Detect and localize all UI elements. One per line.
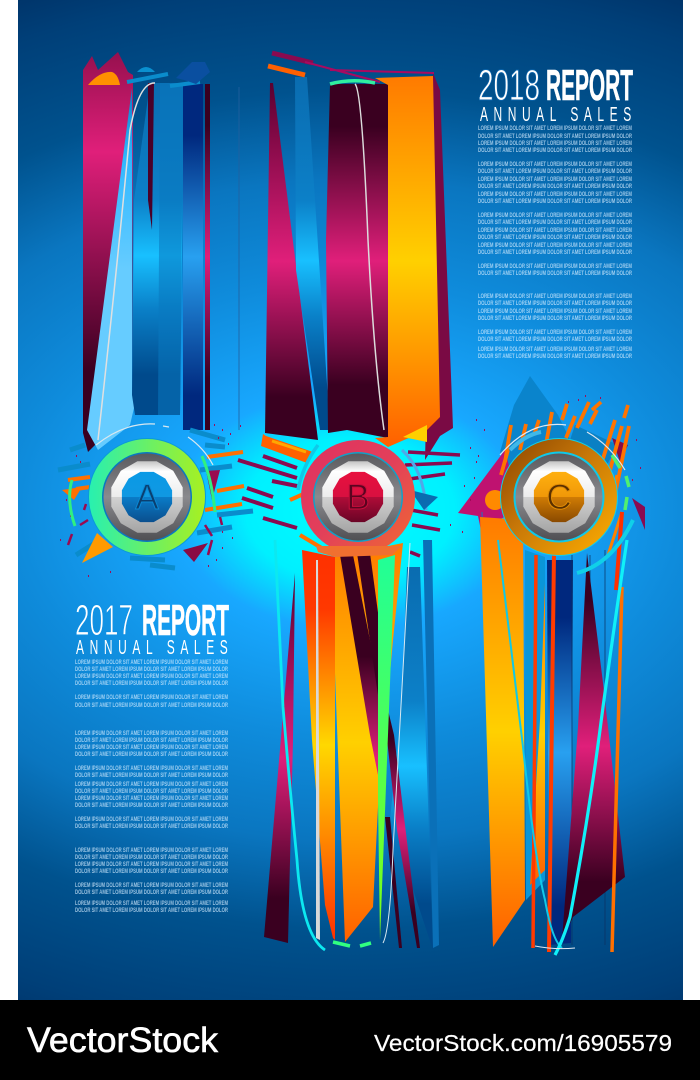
light blue bar A [87,88,137,450]
text block 2017: DOLOR SIT AMET LOREM IPSUM DOLOR SIT AMET LOREM IPSUM DOLOR [75,752,228,758]
text block 2017: LOREM IPSUM DOLOR SIT AMET LOREM IPSUM DOLOR SIT AMET LOREM [75,745,228,751]
blue bar A [132,83,184,415]
orange triangle A [82,533,113,563]
magenta shape C [458,450,520,535]
text block 2017: LOREM IPSUM DOLOR SIT AMET LOREM IPSUM DOLOR SIT AMET LOREM [75,782,228,788]
footer url: VectorStock.com/16905579 [374,1030,672,1056]
green dashes C [612,455,629,510]
footer logo: VectorStock [27,1021,219,1060]
text block 2017: LOREM IPSUM DOLOR SIT AMET LOREM IPSUM DOLOR SIT AMET LOREM [75,674,228,680]
column B: upper bars [265,53,453,460]
infographic canvas: REPORT [142,596,229,645]
text block 2018: DOLOR SIT AMET LOREM IPSUM DOLOR SIT AMET LOREM IPSUM DOLOR [478,271,632,277]
specks C [450,396,641,532]
dark sliver A [148,83,154,230]
heading 2018 report [478,61,633,126]
column C: lower bars [480,517,633,955]
text block 2018: DOLOR SIT AMET LOREM IPSUM DOLOR SIT AMET LOREM IPSUM DOLOR [478,148,632,154]
red panel lower B [302,550,335,940]
text block 2018: LOREM IPSUM DOLOR SIT AMET LOREM IPSUM DOLOR SIT AMET LOREM [478,264,632,270]
badge letter A: A [135,478,159,517]
splatter top A [176,62,210,84]
orange dome A [88,72,120,85]
magenta wedge B [265,83,318,440]
text block 2018: DOLOR SIT AMET LOREM IPSUM DOLOR SIT AMET LOREM IPSUM DOLOR [478,354,632,360]
blue strip lower B [390,567,433,950]
text block 2018: LOREM IPSUM DOLOR SIT AMET LOREM IPSUM DOLOR SIT AMET LOREM [478,228,632,234]
heading 2018 report: ANNUAL SALES [480,104,631,126]
cyan thick curve lower C [555,540,627,955]
dark strip lower B [385,817,402,948]
text block 2017: LOREM IPSUM DOLOR SIT AMET LOREM IPSUM DOLOR SIT AMET LOREM [75,796,228,802]
text block 2017: LOREM IPSUM DOLOR SIT AMET LOREM IPSUM DOLOR SIT AMET LOREM [75,817,228,823]
white arc A [96,424,213,465]
thin white curve lower B [383,543,410,943]
cyan thin curve lower C [498,540,562,948]
specks A [60,425,241,576]
red bars lower C [533,555,536,948]
text block 2018: DOLOR SIT AMET LOREM IPSUM DOLOR SIT AMET LOREM IPSUM DOLOR [478,250,632,256]
heading 2017 report [75,596,229,659]
magenta bar A [83,52,133,452]
blue right strip lower B [423,540,439,948]
magenta sliver A [205,84,210,430]
right magenta triangle C [632,498,645,530]
splatter around badge A [58,424,253,576]
heading 2018 report: 2018 [478,61,540,110]
badge B [301,440,415,554]
navy column lower C [547,560,573,945]
text block 2017 [75,660,228,914]
text block 2017: DOLOR SIT AMET LOREM IPSUM DOLOR SIT AMET LOREM IPSUM DOLOR [75,773,228,779]
text block 2018: DOLOR SIT AMET LOREM IPSUM DOLOR SIT AMET LOREM IPSUM DOLOR [478,337,632,343]
text block 2017: DOLOR SIT AMET LOREM IPSUM DOLOR SIT AMET LOREM IPSUM DOLOR [75,869,228,875]
text block 2018: LOREM IPSUM DOLOR SIT AMET LOREM IPSUM DOLOR SIT AMET LOREM [478,141,632,147]
magenta wedge lower C [562,553,625,940]
text block 2018: LOREM IPSUM DOLOR SIT AMET LOREM IPSUM DOLOR SIT AMET LOREM [478,294,632,300]
text block 2017: LOREM IPSUM DOLOR SIT AMET LOREM IPSUM DOLOR SIT AMET LOREM [75,862,228,868]
navy bar A [183,84,203,430]
right orange bar lower C [612,587,622,952]
dark magenta sliver B [425,73,453,460]
text block 2018: LOREM IPSUM DOLOR SIT AMET LOREM IPSUM DOLOR SIT AMET LOREM [478,309,632,315]
text block 2018: LOREM IPSUM DOLOR SIT AMET LOREM IPSUM DOLOR SIT AMET LOREM [478,347,632,353]
text block 2018: DOLOR SIT AMET LOREM IPSUM DOLOR SIT AMET LOREM IPSUM DOLOR [478,184,632,190]
text block 2017: LOREM IPSUM DOLOR SIT AMET LOREM IPSUM DOLOR SIT AMET LOREM [75,901,228,907]
green arc B [330,81,375,84]
badge C [500,438,618,556]
dark wedge lower B [264,573,295,943]
thin dark lines lower C [572,550,605,945]
text block 2017: DOLOR SIT AMET LOREM IPSUM DOLOR SIT AMET LOREM IPSUM DOLOR [75,667,228,673]
text block 2017: DOLOR SIT AMET LOREM IPSUM DOLOR SIT AMET LOREM IPSUM DOLOR [75,803,228,809]
text block 2018: DOLOR SIT AMET LOREM IPSUM DOLOR SIT AMET LOREM IPSUM DOLOR [478,235,632,241]
white arc lower C [535,946,575,949]
text block 2017: LOREM IPSUM DOLOR SIT AMET LOREM IPSUM DOLOR SIT AMET LOREM [75,766,228,772]
text block 2017: LOREM IPSUM DOLOR SIT AMET LOREM IPSUM DOLOR SIT AMET LOREM [75,660,228,666]
blue right half A [158,83,183,415]
orange panel lower B [335,543,403,942]
orange ticks C [501,402,629,490]
white arc C [500,424,625,470]
green strip lower B [378,555,395,940]
orange bar B [375,76,440,447]
green dashes lower B [333,942,371,946]
text block 2017: DOLOR SIT AMET LOREM IPSUM DOLOR SIT AMET LOREM IPSUM DOLOR [75,908,228,914]
dark stripes lower B [340,555,379,780]
column B: lower bars [264,540,439,950]
badge letter C: C [546,478,572,517]
text block 2018: DOLOR SIT AMET LOREM IPSUM DOLOR SIT AMET LOREM IPSUM DOLOR [478,169,632,175]
bars between badges A and B [238,434,460,556]
white strip lower B [316,560,320,940]
text block 2018: LOREM IPSUM DOLOR SIT AMET LOREM IPSUM DOLOR SIT AMET LOREM [478,162,632,168]
badge letter B: B [346,478,370,517]
text block 2018: DOLOR SIT AMET LOREM IPSUM DOLOR SIT AMET LOREM IPSUM DOLOR [478,220,632,226]
splatter around badge C [450,376,645,600]
text block 2017: LOREM IPSUM DOLOR SIT AMET LOREM IPSUM DOLOR SIT AMET LOREM [75,695,228,701]
magenta strip lower B [386,710,420,948]
heading 2017 report: ANNUAL SALES [76,637,228,659]
text block 2018: LOREM IPSUM DOLOR SIT AMET LOREM IPSUM DOLOR SIT AMET LOREM [478,243,632,249]
text block 2017: DOLOR SIT AMET LOREM IPSUM DOLOR SIT AMET LOREM IPSUM DOLOR [75,824,228,830]
text block 2017: DOLOR SIT AMET LOREM IPSUM DOLOR SIT AMET LOREM IPSUM DOLOR [75,789,228,795]
white curve B [355,84,384,430]
text block 2018 [478,126,632,360]
blue dome A [137,67,155,72]
text block 2017: DOLOR SIT AMET LOREM IPSUM DOLOR SIT AMET LOREM IPSUM DOLOR [75,681,228,687]
text block 2018: DOLOR SIT AMET LOREM IPSUM DOLOR SIT AMET LOREM IPSUM DOLOR [478,134,632,140]
orange panel lower C [480,517,525,947]
magenta bar B [326,84,390,438]
text block 2017: LOREM IPSUM DOLOR SIT AMET LOREM IPSUM DOLOR SIT AMET LOREM [75,883,228,889]
column A: upper bars [83,52,239,452]
blue top strokes A [127,74,200,86]
blue strip B [295,77,330,430]
collar under badge B [316,545,403,557]
footer bar [0,1000,700,1080]
text block 2018: LOREM IPSUM DOLOR SIT AMET LOREM IPSUM DOLOR SIT AMET LOREM [478,126,632,132]
badge A [88,438,206,556]
text block 2017: DOLOR SIT AMET LOREM IPSUM DOLOR SIT AMET LOREM IPSUM DOLOR [75,738,228,744]
text block 2018: LOREM IPSUM DOLOR SIT AMET LOREM IPSUM DOLOR SIT AMET LOREM [478,330,632,336]
text block 2018: LOREM IPSUM DOLOR SIT AMET LOREM IPSUM DOLOR SIT AMET LOREM [478,213,632,219]
top bars B [272,53,313,63]
text block 2017: DOLOR SIT AMET LOREM IPSUM DOLOR SIT AMET LOREM IPSUM DOLOR [75,855,228,861]
text block 2017: LOREM IPSUM DOLOR SIT AMET LOREM IPSUM DOLOR SIT AMET LOREM [75,848,228,854]
green arcs A [70,456,215,526]
heading 2017 report: 2017 [75,596,133,645]
bars right of badge B [400,452,460,556]
white curve A [98,83,155,440]
text block 2017: DOLOR SIT AMET LOREM IPSUM DOLOR SIT AMET LOREM IPSUM DOLOR [75,703,228,709]
blue strip lower C [525,550,545,900]
text block 2017: DOLOR SIT AMET LOREM IPSUM DOLOR SIT AMET LOREM IPSUM DOLOR [75,890,228,896]
blue triangle C [500,376,575,470]
cyan curve lower B [275,540,325,950]
text block 2018: DOLOR SIT AMET LOREM IPSUM DOLOR SIT AMET LOREM IPSUM DOLOR [478,316,632,322]
text block 2018: DOLOR SIT AMET LOREM IPSUM DOLOR SIT AMET LOREM IPSUM DOLOR [478,301,632,307]
yellow triangle B [403,425,427,442]
text block 2018: DOLOR SIT AMET LOREM IPSUM DOLOR SIT AMET LOREM IPSUM DOLOR [478,199,632,205]
text block 2018: LOREM IPSUM DOLOR SIT AMET LOREM IPSUM DOLOR SIT AMET LOREM [478,192,632,198]
inner orange lower C [530,583,545,885]
cyan arc lower C [577,520,633,573]
blue mass C [570,425,618,470]
orange dome C [485,490,505,510]
text block 2017: LOREM IPSUM DOLOR SIT AMET LOREM IPSUM DOLOR SIT AMET LOREM [75,731,228,737]
text block 2018: LOREM IPSUM DOLOR SIT AMET LOREM IPSUM DOLOR SIT AMET LOREM [478,177,632,183]
